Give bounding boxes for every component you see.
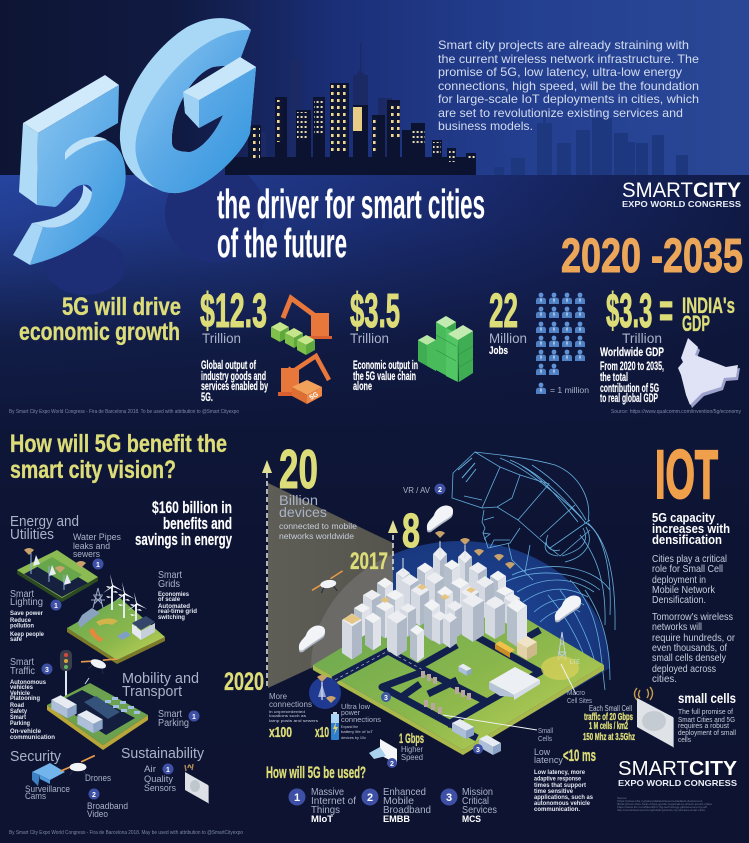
savings callout: savings in energy [135,530,232,549]
densification text: require hundreds, or [652,632,735,644]
hall building [489,667,540,700]
growth arrow 2017 to 8 billion [388,520,398,570]
use case 1: Things [311,804,340,816]
logo: Smart City Expo bottom [618,758,738,788]
benefits heading [10,430,227,484]
stat: 20 billion devices [279,438,358,541]
badge 3 road: 3 [476,747,480,754]
more connections: x100 [269,724,292,741]
ultra low power: connections [341,715,381,724]
stat: $3.3 trillion: Trillion [622,330,662,346]
icon: robot arm with cubes [271,298,332,355]
badge 3 city [381,692,391,702]
battery icon [331,712,339,740]
yellow truck [495,641,515,658]
small building [517,636,537,660]
use case 1: 1 [294,792,300,804]
cubes [271,322,315,355]
VR headset woman outline [452,452,615,690]
ultra low power: power [341,708,360,717]
densification text: deployed across [652,663,716,675]
stat: $3.3 trillion: the total [600,370,628,384]
densification heading: densification [652,532,722,547]
stat: $3.3 trillion: $3.3 = [606,285,673,338]
far blue skyline [494,112,688,175]
densification text: small cells densely [652,652,727,664]
intro paragraph: Smart city projects are already straining with [438,39,689,52]
logo: Smart City Expo bottom: SMART [618,758,689,780]
connectivity dome [310,541,610,754]
smart traffic text: 3 [45,667,49,674]
use case 3: Services [462,804,497,816]
water pipes label [73,532,121,570]
sources small print: http://smartcitiescouncil.org/building-blocks-cty-wireless-smart-cities [617,808,705,812]
small cells text: The full promise of [678,709,733,716]
low latency: communication. [534,807,580,813]
road markings [335,651,423,680]
stat: $12.3 trillion: industry goods and [201,369,266,383]
stat: $3.5 trillion: $3.5 [350,285,400,338]
house [132,616,155,630]
more connections: More [269,692,288,701]
ultra low power: Ultra low [341,702,371,711]
smart lighting text: pollution [10,624,34,630]
stat: $3.5 trillion [350,285,418,393]
higher speed: 2 [390,761,394,768]
densification text: even thousands, of [652,642,727,654]
low latency: Low [534,747,550,758]
more connections: in unprecedented [269,709,305,714]
icon: money stacks [418,316,473,382]
small cells label [538,728,553,743]
use case 1: MIoT [311,814,334,824]
street units row [421,671,471,714]
small cells text: deployment of small [678,730,736,737]
logo: Smart City Expo bottom: CITY [689,758,738,780]
intro paragraph: promise of 5G, low latency, ultra-low energy [438,66,682,79]
smart traffic text: Smart [10,715,26,721]
stat: $12.3 trillion: 5G. [201,390,213,404]
people legend [536,383,589,395]
small cells text [678,690,736,744]
more connections: connections [269,700,312,709]
logo: Smart City Expo top: EXPO WORLD CONGRESS [622,199,741,209]
low latency: Low latency, more [534,770,586,776]
use case 3: 3 [446,792,452,804]
water pipes label: Water Pipes [73,532,121,542]
ultra low power: x10 [315,724,329,741]
wind turbines [103,574,147,628]
densification text: Tomorrow's wireless [652,611,733,623]
smart parking label: 1 [192,714,196,721]
logo: Smart City Expo top: SMART [622,179,693,202]
smart traffic text: vehicles [10,685,34,691]
stat: 20 billion devices: Billion [279,492,318,508]
small cell capacity: Each Small Cell [589,704,632,713]
savings callout [135,498,232,549]
use case 3: Critical [462,795,489,807]
low latency: times that support [534,783,586,789]
buildings [342,541,527,662]
smart lighting text [10,589,62,643]
macro cell label [567,690,592,705]
densification text: networks will [652,621,702,633]
low latency: time sensitive [534,789,574,795]
densification text: Mobile Network [652,584,716,596]
smart grids text: Economies [158,592,190,598]
icon: robot arm with orange box [278,356,329,404]
water pipes label: 1 [96,562,100,569]
section: energy and utilities: Utilities [10,527,54,543]
higher speed: Higher [401,745,423,754]
large badge VR/AV label [403,484,446,495]
smart grids text [158,570,197,621]
footnote: attribution: By Smart City Expo World Congress - Fira de Barcelona 2018. To be used with attribution to @Smart Cityexpo [9,409,239,415]
stat: 20 billion devices: networks worldwide [279,532,355,541]
badge 3 city: 3 [384,695,388,702]
section: sustainability: Sensors [144,783,176,794]
small cells label: Cells [538,736,552,743]
smart parking label: Smart [158,709,182,720]
small cells text: cells [678,737,691,744]
smart traffic text: Parking [10,721,30,727]
background: title band [0,175,749,431]
drone over wedge [310,571,345,594]
benefits heading: smart city vision? [10,456,176,484]
smart lighting text: Reduce [10,618,32,624]
smart traffic text: Platooning [10,696,40,702]
stat: $3.5 trillion: Economic output in [353,358,418,372]
icon: security drone [60,756,95,776]
stat: $3.3 trillion: to real global GDP [600,391,658,405]
savings callout: $160 billion in [152,498,232,517]
densification text: Densification. [652,594,706,606]
smart traffic text: Smart [10,657,34,668]
clouds [299,505,581,652]
smart parking label [158,709,200,729]
smart lighting block illustration [17,548,98,602]
densification heading: increases with [652,521,730,536]
pylon [91,588,105,608]
section: mobility and transport: Transport [122,684,182,700]
densification heading [652,510,730,547]
low latency: <10 ms [563,746,596,765]
stat: 22 million jobs: Jobs [489,345,508,357]
section: sustainability [121,746,209,804]
platform vehicles [452,664,501,755]
small cell capacity: 150 Mhz at 3.5Ghz [583,732,635,743]
digit 5 [13,75,126,265]
stat: 22 million jobs [489,285,527,357]
small cell pointer line [443,664,576,730]
section: security: Broadband [87,801,128,811]
footnote: attribution lower: By Smart City Expo World Congress - Fira de Barcelona 2018. May be used with attribution to @SmartCityexpo [9,830,243,836]
smart grids text: of scale [158,597,181,603]
smart grids text: Smart [158,570,182,581]
stat: 22 million jobs: Million [489,330,527,346]
stat: $12.3 trillion: $12.3 [200,285,267,338]
LTE coverage [541,656,580,680]
use case 2: 2 [367,792,373,804]
densification text: deployment in [652,574,706,586]
section: sustainability: Quality [144,774,173,785]
stat: $3.5 trillion: the 5G value chain [353,369,416,383]
use case 1 [288,786,356,824]
background: lower section [0,430,749,843]
ultra low power: Expand the [341,724,359,729]
stat: $12.3 trillion: services enabled by [201,379,268,393]
year 2017: 2017 [350,548,388,575]
stat: $3.3 trillion [600,285,735,405]
icon: air sensor [185,764,209,804]
background: title band fade [0,175,749,431]
logo: Smart City Expo top: CITY [693,179,741,202]
roads [333,630,540,738]
footnote: source: Source: https://www.qualcomm.com/invention/5g/economy [611,409,741,415]
smart grids text: switching [158,615,185,621]
icon: surveillance cam [32,763,65,786]
ultra low power: devices by 10x [341,735,366,740]
section: security: Surveillance [25,784,70,794]
stat: $3.3 trillion: contribution of 5G [600,381,659,395]
sources small print [617,796,713,812]
logo: Smart City Expo bottom: EXPO WORLD CONGRESS [618,778,737,788]
use case 2: Enhanced [383,786,426,798]
low latency: latency [534,755,563,766]
stat: $3.5 trillion: Trillion [350,330,389,346]
densification text: cities. [652,673,677,685]
section: security [10,749,128,819]
more connections: lamp posts and sewers [269,718,318,723]
stat: $3.3 trillion: Worldwide GDP [600,345,664,359]
smart lighting text: 1 [54,603,58,610]
background: top sky [0,0,749,176]
low latency: applications, such as [534,795,594,801]
isometric smart city [313,531,604,755]
macro cell label: Cell Sites [567,698,592,705]
low latency: adaptive response [534,776,582,782]
section: security: Video [87,809,108,819]
densification text: Cities play a critical [652,553,727,565]
water pipes label: sewers [73,549,100,559]
gray device wedge [268,483,393,688]
year 2020: 2020 [224,668,264,696]
stat: $12.3 trillion: Global output of [201,358,257,372]
smart grids text: Automated [158,604,190,610]
densification text: role for Small Cell [652,563,723,575]
use case 1: Internet of [311,795,356,807]
stat: 22 million jobs: 22 [489,285,518,338]
logo: Smart City Expo top [622,179,741,209]
smart traffic text: Vehicle [10,691,31,697]
dome overlap on wedge [311,554,393,668]
smart lighting text: safe [10,637,23,643]
more connections [269,675,341,741]
front buildings [225,83,476,175]
smart traffic text: Safety [10,709,28,715]
background reflections [45,163,265,295]
higher speed: Speed [401,753,423,762]
more connections: locations such as [269,713,306,718]
section: security: Drones [85,773,111,783]
sources small print: https://www.fcc.com/files/2017-5g-technology-global-economy.pdf [617,805,707,809]
intro paragraph: for large-scale IoT deployments in cities, which [438,93,699,106]
icon: India map [678,338,740,408]
smart grids text: real-time grid [158,609,197,615]
large badge VR/AV label: VR / AV [403,485,430,495]
people legend: = 1 million [550,386,589,395]
benefits heading: How will 5G benefit the [10,430,227,458]
icon: small cell device [634,687,674,748]
smart traffic text: On-vehicle [10,729,42,735]
section: energy and utilities: Energy and [10,514,79,530]
badge 3 road [473,744,483,754]
small cell capacity [583,704,635,743]
smart lighting text: Save power [10,611,44,617]
section: mobility and transport [122,671,199,700]
use case 3: Mission [462,786,493,798]
smart lighting text: Keep people [10,632,45,638]
use case 3 [440,786,497,824]
smart lighting text: Lighting [10,597,43,608]
water pipes label: leaks and [73,541,110,551]
sources small print: Source: [617,796,627,800]
growth arrow 2020 to 20 billion [262,460,272,688]
5G big logo [13,18,256,265]
smart grids text: Grids [158,579,180,590]
small cells text: Smart Cities and 5G [678,717,735,724]
low latency: autonomous vehicle [534,801,591,807]
stat: $3.3 trillion: From 2020 to 2035, [600,359,664,373]
stat: 20 billion devices: 20 [279,438,318,500]
stat: $12.3 trillion [200,285,268,404]
subtitle [217,181,485,266]
small cells label: Small [538,728,553,735]
macro cell label: Macro [567,690,585,697]
ultra low power: battery life of IoT [341,729,374,734]
small cell capacity: traffic of 20 Gbps [584,712,633,723]
use case 2: EMBB [383,814,411,824]
sources small print: library/how-ctos-help-cities-guide-regional-to-direct-smart-cities [617,802,713,806]
ultra low power [315,702,381,741]
intro paragraph: business models. [438,120,533,133]
lit windows [250,85,475,162]
macro cell tower [558,632,566,660]
savings callout: benefits and [163,514,232,533]
use case 2 [362,786,431,824]
smart traffic text [10,657,55,741]
digit G [120,18,256,193]
stat: $12.3 trillion: Trillion [202,330,241,346]
smart grid block illustration [67,574,165,664]
economic growth heading [19,293,181,346]
how will 5G be used heading: How will 5G be used? [266,763,366,782]
lamp circle icon [309,675,341,709]
stat: $3.5 trillion: alone [353,379,372,393]
higher speed: 1 Gbps [399,730,424,746]
small cell capacity: 1 M cells / km2 [589,721,628,732]
stat: $3.3 trillion: GDP [682,311,710,336]
section: sustainability: Sustainability [121,746,205,762]
section: security: Security [10,749,62,765]
subtitle: of the future [217,220,347,266]
small cells text: small cells [678,690,736,706]
intro paragraph: connections, high speed, will be the foundation [438,80,699,93]
icon: robot arm with orange box: 5G [308,391,320,402]
use case 2: Broadband [383,804,431,816]
densification heading: 5G capacity [652,510,716,525]
icon: drone [80,648,117,677]
back buildings [258,43,392,165]
LTE coverage: LTE [570,660,580,666]
large badge VR/AV label: 2 [438,487,442,494]
sources small print: https://www.cbs.ng/sites/default/source/default-document- [617,799,703,803]
low latency [534,746,596,813]
section: energy and utilities [9,436,738,836]
icon: traffic light [60,650,72,698]
economic growth heading: 5G will drive [62,293,181,321]
dark city skyline [225,43,476,175]
section: sustainability: Air [144,764,156,775]
smart traffic text: Road [10,703,24,709]
subtitle: the driver for smart cities [217,181,485,227]
stat: 20 billion devices: devices [279,504,327,520]
smart traffic text: Traffic [10,666,35,677]
densification text [652,553,735,685]
economic growth heading: economic growth [19,318,180,346]
section: security: Cams [25,791,46,801]
smart lighting text: Smart [10,589,34,600]
smart parking label: Parking [158,718,189,729]
stat: 8: 8 [402,505,420,558]
small cells text: requires a robust [678,723,729,730]
section: security: 2 [92,792,96,799]
use case 3: MCS [462,814,481,824]
icon grid: people [536,293,585,375]
stat: 20 billion devices: connected to mobile [279,522,358,531]
intro paragraph: are set to revolutionize existing services and [438,107,683,120]
section: mobility and transport: Mobility and [122,671,199,687]
smart traffic text: communication [10,735,55,741]
section: sustainability: 1 [166,767,170,774]
higher speed [369,730,424,768]
use case 2: Mobile [383,795,414,807]
mobility block illustration [47,678,148,750]
smart traffic text: Autonomous [10,680,47,686]
roof accents [343,584,476,624]
intro paragraph [438,39,699,133]
intro paragraph: the current wireless network infrastructure. The [438,53,699,66]
platform [313,578,604,755]
icon: screen and cam [369,739,397,764]
wifi antennas [435,531,515,569]
use case 1: Massive [311,786,344,798]
